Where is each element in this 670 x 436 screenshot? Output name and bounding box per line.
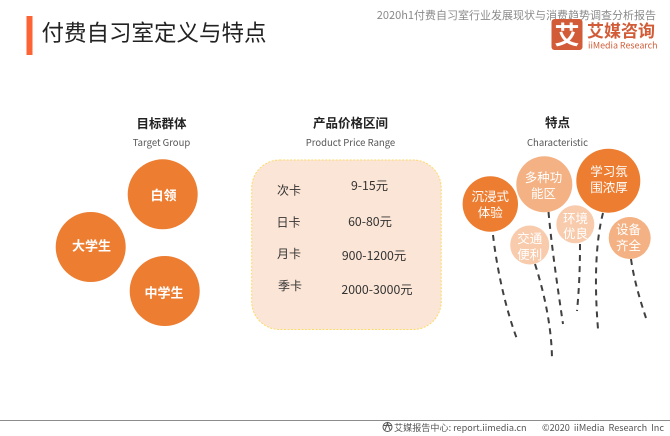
bubble: multifunction zones: 多种功 xyxy=(525,167,562,186)
circle: college students xyxy=(56,212,126,282)
row: quarterly pass: 季卡 xyxy=(278,277,302,294)
balloon strings xyxy=(493,212,646,361)
bubble: good environment xyxy=(556,205,594,243)
subheading: target group: Target Group xyxy=(133,135,190,149)
bubble: good environment: 环境 xyxy=(563,208,588,227)
subheading: characteristics: Characteristic xyxy=(527,135,588,149)
bubble: complete equipment xyxy=(609,217,651,259)
copyright: ©2020 iiMedia Research Inc xyxy=(542,420,664,434)
circle: college students: 大学生 xyxy=(72,236,111,254)
row: per visit: 次卡 xyxy=(277,182,301,198)
circle: white collar: 白领 xyxy=(150,185,177,204)
bubble: complete equipment: 设备 xyxy=(616,219,641,238)
bubble: multifunction zones: 能区 xyxy=(531,183,556,202)
icon: globe xyxy=(383,422,392,432)
row: quarterly pass: 2000-3000元 xyxy=(341,280,413,298)
panel: target group xyxy=(56,113,200,326)
bubble: convenient transport: 便利 xyxy=(517,244,542,263)
logo: iiMedia Research xyxy=(552,16,658,52)
bubble: multifunction zones xyxy=(516,156,572,212)
bubble: study atmosphere: 围浓厚 xyxy=(590,177,628,196)
row: per visit: 9-15元 xyxy=(351,176,388,194)
row: day pass: 日卡 xyxy=(276,214,301,230)
row: day pass: 60-80元 xyxy=(348,212,392,230)
row: quarterly pass xyxy=(278,277,413,298)
title: 付费自习室定义与特点 xyxy=(42,16,267,48)
row: monthly pass xyxy=(277,245,406,264)
circle: middle school students xyxy=(130,256,200,326)
footer xyxy=(0,420,670,434)
logo: iiMedia Research: iiMedia Research xyxy=(588,38,658,52)
logo: iiMedia Research: 艾媒咨询 xyxy=(587,17,655,42)
footer text: 艾媒报告中心: report.iimedia.cn xyxy=(394,420,527,434)
bubble: convenient transport: 交通 xyxy=(517,228,543,247)
bubble: study atmosphere: 学习氛 xyxy=(590,161,628,180)
heading: target group: 目标群体 xyxy=(136,113,187,132)
heading: price range: 产品价格区间 xyxy=(313,112,388,132)
bubble: good environment: 优良 xyxy=(563,223,588,242)
row: monthly pass: 900-1200元 xyxy=(342,246,406,264)
bubble: immersive xyxy=(463,176,518,232)
circle: white collar xyxy=(128,159,198,229)
panel: product price range xyxy=(252,112,441,330)
bubble: immersive: 沉浸式 xyxy=(472,186,510,205)
subheading: price range: Product Price Range xyxy=(306,135,395,149)
panel: characteristics xyxy=(463,112,651,361)
heading: characteristics: 特点 xyxy=(545,112,570,131)
row: day pass xyxy=(276,212,392,230)
bubble: immersive: 体验 xyxy=(478,202,503,221)
bubble: convenient transport xyxy=(510,226,549,264)
logo: iiMedia Research: 艾 xyxy=(554,16,580,52)
row: per visit xyxy=(277,176,388,198)
bubble: study atmosphere xyxy=(576,149,640,213)
bubble: complete equipment: 齐全 xyxy=(616,235,641,254)
circle: middle school students: 中学生 xyxy=(144,282,184,302)
report name: 2020h1付费自习室行业发展现状与消费趋势调查分析报告 xyxy=(377,7,656,23)
price table xyxy=(252,160,441,330)
row: monthly pass: 月卡 xyxy=(277,245,301,262)
